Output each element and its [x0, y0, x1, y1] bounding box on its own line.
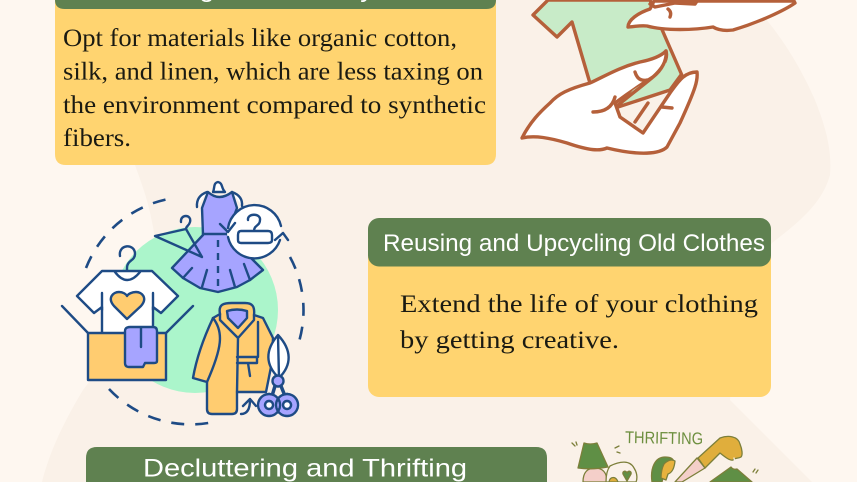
panel: decluttering and thrifting heading [86, 447, 547, 482]
heading text: Reusing and Upcycling Old Clothes [383, 230, 765, 257]
body text: Extend the life of your clothing [400, 291, 759, 318]
swap arrows [220, 205, 288, 258]
icon: green t-shirt [533, 0, 684, 90]
icon: yellow coat [193, 303, 273, 414]
icon: upper hand finger lines [650, 1, 697, 17]
yellow sleeve and hand [698, 436, 742, 468]
hair [652, 457, 674, 482]
thrifting label: THRIFTING [625, 428, 703, 448]
icon: t-shirt hem between fingers [618, 62, 680, 107]
collar and sleeve seams [102, 272, 153, 310]
illustration: thrifting character [572, 428, 758, 482]
panel: reusing and upcycling [368, 218, 771, 397]
body text: Opt for materials like organic cotton, [63, 25, 457, 52]
loop outlines [258, 394, 298, 416]
body text: the environment compared to synthetic [63, 92, 486, 119]
white circle [227, 205, 281, 259]
body text: silk, and linen, which are less taxing on [63, 58, 484, 86]
heading text: Decluttering and Thrifting [143, 454, 467, 482]
heart [111, 292, 144, 319]
icon: box with t-shirt [62, 246, 193, 380]
cardboard box [88, 333, 166, 380]
face [661, 460, 675, 480]
handles [272, 386, 285, 396]
panel body [368, 230, 771, 397]
green garment on hanger [710, 467, 752, 482]
lamp base [583, 468, 607, 482]
wire hanger [155, 216, 202, 257]
illustration: hands holding a green t-shirt [522, 0, 795, 153]
hanger icon [238, 215, 272, 243]
pink arm [675, 458, 705, 482]
green circle backdrop [112, 227, 278, 393]
panel: natural fabrics [55, 0, 496, 165]
mannequin [197, 182, 242, 207]
blades [268, 335, 289, 378]
pillow yellow patch [609, 478, 618, 482]
heading bar [86, 447, 547, 482]
illustration: reusing and upcycling clothes [62, 182, 304, 424]
dashed circle [86, 198, 304, 424]
white t-shirt [77, 271, 178, 335]
coat seams [207, 314, 258, 392]
hanger [731, 458, 737, 474]
icon: upper hand [628, 1, 795, 30]
lamp shade [578, 443, 608, 469]
panel body [55, 0, 496, 165]
pivot [272, 376, 284, 386]
body text: fibers. [63, 125, 131, 152]
icon: lower hand [522, 51, 697, 153]
dress centre dashes [217, 240, 219, 290]
heading bar [368, 218, 771, 266]
coat collar [227, 310, 247, 328]
left loop [262, 398, 276, 412]
sparkle ticks [572, 442, 758, 473]
arrow: coat to scissors [241, 399, 256, 414]
coat silhouette [193, 303, 273, 414]
t-shirt hanger hook [120, 246, 135, 272]
icon: scissors [258, 335, 298, 416]
heading bar [55, 0, 496, 9]
pillow heart [623, 471, 631, 481]
right loop [280, 398, 294, 412]
icon: purple dress with hanger [155, 182, 288, 292]
box flaps [62, 306, 193, 333]
dress waist and pleats [183, 234, 250, 287]
icon: thumb outline [593, 51, 681, 122]
body text: by getting creative. [400, 327, 619, 354]
purple folded cloth [125, 327, 157, 367]
dress [172, 192, 263, 292]
heart pillow [606, 462, 637, 482]
